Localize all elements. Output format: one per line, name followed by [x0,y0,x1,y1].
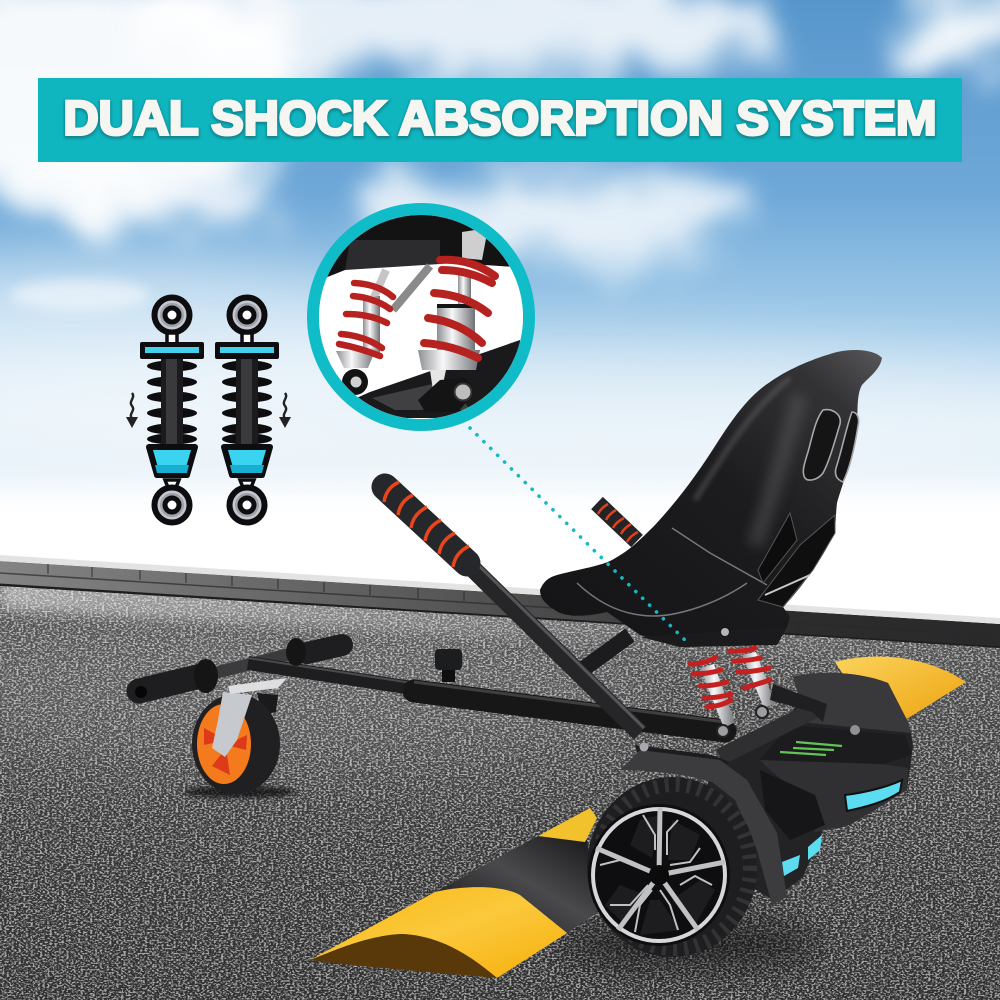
seat [540,350,882,647]
hoverboard front wheel [587,777,757,957]
callout: magnified shock detail [310,209,535,425]
near speed bump [310,808,597,978]
go-kart frame: main bar and steering bar [207,635,725,731]
caster wheel [184,678,296,798]
sky background [0,0,1000,660]
dotted leader line [470,428,690,645]
asphalt road [0,570,1000,1000]
steering grips [135,638,342,698]
title banner: DUAL SHOCK ABSORPTION SYSTEM [64,92,936,146]
go-kart seat tube and front handle [384,482,644,733]
title banner [38,78,962,162]
rear grip [597,503,638,542]
adjuster knob [435,649,462,682]
low brick wall behind road [0,555,1000,650]
icon: pair of shock absorbers [126,298,291,522]
far speed bump [835,656,966,720]
rear shock absorbers [690,648,775,737]
title banner: DUAL SHOCK ABSORPTION SYSTEM [64,94,936,147]
hoverboard body [620,673,913,905]
